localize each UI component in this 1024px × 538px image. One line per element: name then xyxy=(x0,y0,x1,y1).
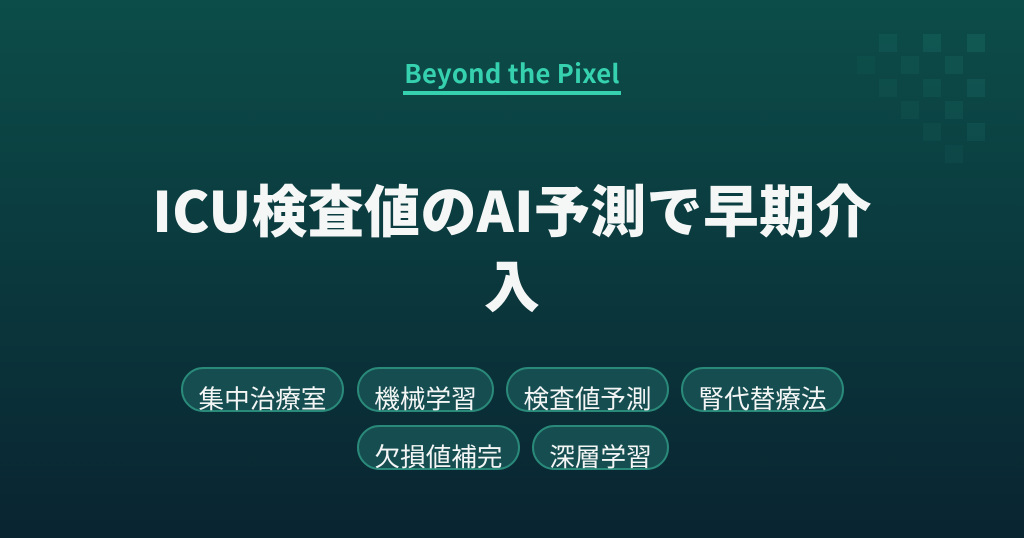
title: 入 xyxy=(484,243,540,324)
tag: 深層学習: 深層学習 xyxy=(549,436,652,474)
tag: 集中治療室 xyxy=(181,367,344,412)
tag: 深層学習 xyxy=(532,425,669,470)
tag: 検査値予測 xyxy=(506,367,669,412)
tag: 欠損値補完 xyxy=(357,425,520,470)
tag: 腎代替療法 xyxy=(681,367,844,412)
tag: 機械学習: 機械学習 xyxy=(374,378,477,416)
tag row xyxy=(181,367,844,474)
title: ICU検査値のAI予測で早期介 xyxy=(152,168,872,249)
tag: 機械学習 xyxy=(357,367,494,412)
tag: 腎代替療法: 腎代替療法 xyxy=(698,378,826,416)
brand label: Beyond the Pixel: Beyond the Pixel xyxy=(404,54,620,91)
tag: 検査値予測: 検査値予測 xyxy=(524,378,651,416)
decorative square pattern xyxy=(879,34,985,141)
tag: 集中治療室: 集中治療室 xyxy=(198,378,326,416)
tag: 欠損値補完: 欠損値補完 xyxy=(374,436,502,474)
title xyxy=(152,168,872,324)
